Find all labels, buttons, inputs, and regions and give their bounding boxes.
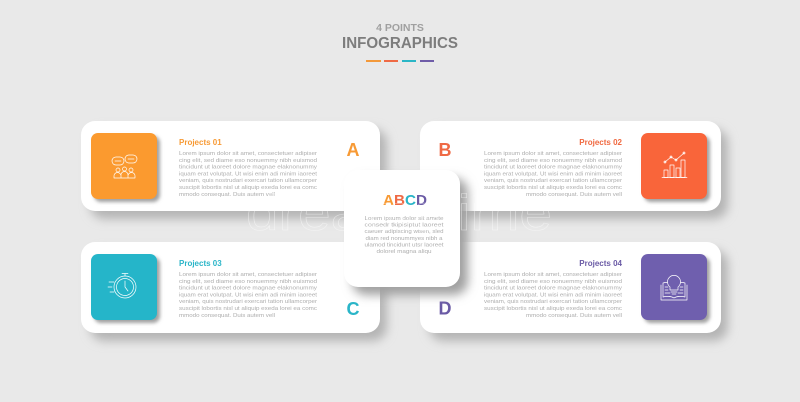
body text: Lorem ipsum dolor sit amet, consectetuer adipiser: [484, 151, 622, 157]
icon: stopwatch: [108, 274, 136, 298]
centre body text: dolorel magna aliqu: [376, 249, 432, 255]
card: [81, 121, 380, 211]
body text: suscipit lobortis nisl ut aliquip exeda lorei ea comc: [179, 306, 317, 312]
icon tile: [641, 254, 707, 320]
body text: veniam, quis nostrudari exercari tation ullamcorper: [179, 299, 317, 305]
body text: veniam, quis nostrudari exercari tation ullamcorper: [484, 299, 622, 305]
heading: Projects 03: [179, 259, 222, 268]
letter D: D: [438, 298, 452, 318]
title: infographics: INFOGRAPHICS: [342, 35, 458, 52]
icon tile: [641, 133, 707, 199]
body text: mmodo consequat. Duis autem vell: [179, 313, 275, 319]
body text: cing elit, sed diame eso nonuemmy nibh euismod: [484, 158, 622, 164]
body text: iquam erat volutpat. Ut wisi enim adi minim iaoreet: [484, 292, 622, 298]
body text: iquam erat volutpat. Ut wisi enim adi minim iaoreet: [179, 292, 317, 298]
watermark: dreamstime: [246, 185, 552, 241]
card: [420, 242, 721, 333]
icon tile shadow: [94, 257, 160, 323]
icon tile shadow: [644, 136, 710, 202]
card shadow: [90, 250, 387, 341]
centre body text: Lorem ipsum dolor sit amete: [364, 216, 444, 222]
icon tile shadow: [94, 136, 160, 202]
body text: mmodo consequat. Duis autem vell: [526, 192, 622, 198]
body text: iquam erat volutpat. Ut wisi enim adi minim iaoreet: [179, 171, 317, 177]
title block: [342, 22, 458, 62]
heading: Projects 02: [579, 138, 623, 147]
panel: D: [420, 242, 728, 341]
body text: veniam, quis nostrudari exercari tation ullamcorper: [179, 178, 317, 184]
card: [81, 242, 380, 333]
body text: Lorem ipsum dolor sit amet, consectetuer adipiser: [484, 272, 622, 278]
heading: Projects 01: [179, 138, 222, 147]
body text: cing elit, sed diame eso nonuemmy nibh euismod: [179, 158, 317, 164]
body text: [484, 151, 622, 198]
body text: tincidunt ut laoreet dolore magnae elaknonummy: [179, 286, 317, 292]
body text: [179, 272, 317, 319]
body text: tincidunt ut laoreet dolore magnae elaknonummy: [179, 165, 317, 171]
centre body text: ulamod tincidunt utsr laoreet: [364, 242, 444, 248]
body text: tincidunt ut laoreet dolore magnae elaknonummy: [484, 286, 622, 292]
body text: Lorem ipsum dolor sit amet, consectetuer adipiser: [179, 151, 317, 157]
card shadow: [429, 250, 728, 341]
body text: [484, 272, 622, 319]
body text: suscipit lobortis nisl ut aliquip exeda lorei ea comc: [484, 306, 622, 312]
letter B: B: [438, 140, 452, 160]
card shadow: [429, 129, 728, 219]
body text: iquam erat volutpat. Ut wisi enim adi minim iaoreet: [484, 171, 622, 177]
centre card: [344, 170, 460, 287]
centre shadow: [352, 178, 468, 295]
body text: cing elit, sed diame eso nonuemmy nibh euismod: [179, 279, 317, 285]
icon tile: [91, 254, 157, 320]
panel: B: [420, 121, 728, 219]
letter A: A: [346, 140, 360, 160]
body text: mmodo consequat. Duis autem vell: [526, 313, 622, 319]
centre heading: ABCD: [383, 192, 427, 209]
letter C: C: [346, 299, 360, 319]
body text: tincidunt ut laoreet dolore magnae elaknonummy: [484, 165, 622, 171]
panel: centre ABCD: [344, 170, 468, 295]
heading: Projects 04: [579, 259, 623, 268]
panel: A: [81, 121, 387, 219]
centre body text: diam red nonummyes nibh a: [366, 236, 443, 242]
icon: open book with light bulb: [661, 275, 687, 300]
icon: growth chart: [662, 152, 687, 178]
card: [420, 121, 721, 211]
body text: suscipit lobortis nisl ut aliquip exeda lorei ea comc: [484, 185, 622, 191]
icon tile shadow: [644, 257, 710, 323]
centre body text: [364, 216, 444, 255]
icon tile: [91, 133, 157, 199]
subtitle: 4 points: 4 POINTS: [376, 22, 424, 34]
body text: veniam, quis nostrudari exercari tation ullamcorper: [484, 178, 622, 184]
colour dashes: [366, 60, 434, 62]
centre body text: caeuer adipiscing wisen, sled: [364, 229, 444, 235]
panel: C: [81, 242, 387, 341]
body text: Lorem ipsum dolor sit amet, consectetuer adipiser: [179, 272, 317, 278]
centre body text: consedr tkipisiptut laoreet: [364, 223, 444, 229]
body text: cing elit, sed diame eso nonuemmy nibh euismod: [484, 279, 622, 285]
body text: suscipit lobortis nisl ut aliquip exeda lorei ea comc: [179, 185, 317, 191]
card shadow: [90, 129, 387, 219]
icon: chat and people: [112, 155, 137, 178]
body text: mmodo consequat. Duis autem vell: [179, 192, 275, 198]
body text: [179, 151, 317, 198]
